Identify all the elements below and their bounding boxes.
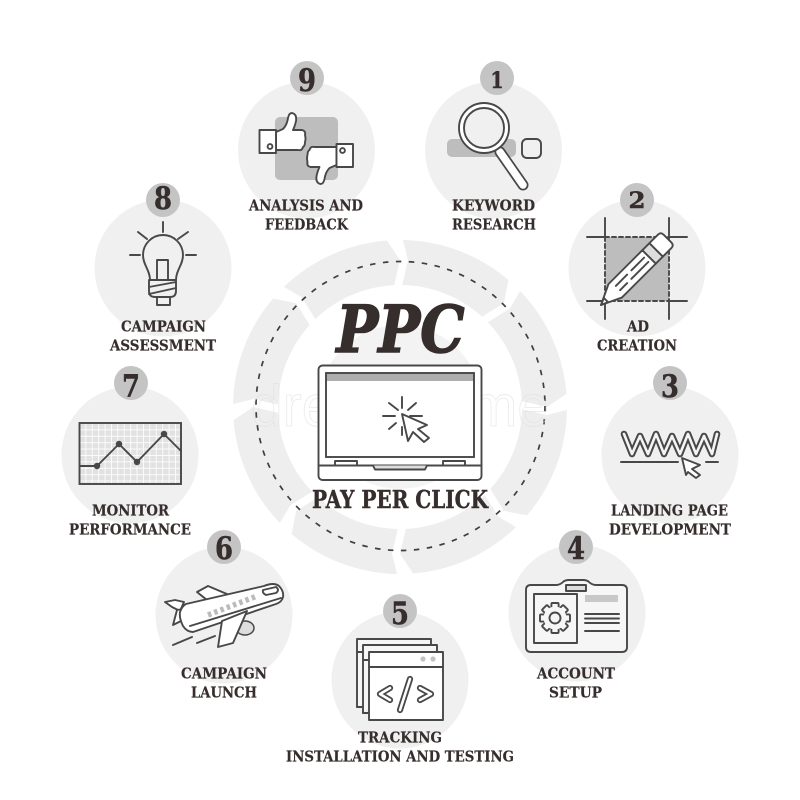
panel: step 4 account setup: ACCOUNT: [536, 666, 615, 682]
panel: step 5 tracking installation and testing: [286, 594, 514, 766]
panel: step 2 ad creation: AD: [626, 318, 649, 336]
icon: thumbs up and down: [260, 113, 353, 184]
title: PPC: PPC: [335, 292, 465, 368]
panel: step 4 account setup: SETUP: [549, 684, 602, 702]
panel: step 8 campaign assessment: 8: [154, 181, 172, 217]
icon: line chart: [80, 423, 181, 484]
panel: step 5 tracking installation and testing: TRACKING: [358, 730, 442, 746]
icon: id card with gear: [526, 580, 627, 652]
panel: step 5 tracking installation and testing: 5: [391, 596, 409, 632]
panel: step 7 monitor performance: PERFORMANCE: [69, 522, 191, 538]
panel: step 3 landing page development: [602, 366, 738, 538]
panel: step 1 keyword research: 1: [490, 68, 504, 94]
panel: step 7 monitor performance: [62, 366, 198, 538]
subtitle: pay per click: PAY PER CLICK: [312, 485, 489, 514]
panel: step 2 ad creation: [568, 183, 706, 354]
panel: step 8 campaign assessment: [94, 181, 232, 354]
panel: step 2 ad creation: 2: [628, 188, 646, 214]
panel: step 4 account setup: [508, 530, 646, 702]
panel: step 7 monitor performance: MONITOR: [92, 502, 170, 520]
icon: magnifier: [447, 103, 541, 185]
icon: code windows: [357, 639, 443, 720]
panel: step 2 ad creation: CREATION: [597, 338, 677, 354]
panel: step 7 monitor performance: 7: [122, 369, 140, 405]
inner pale disc: [318, 325, 482, 489]
icon: laptop with cursor: [318, 366, 482, 480]
icon: light bulb: [130, 222, 196, 305]
panel: step 3 landing page development: 3: [661, 369, 679, 405]
panel: step 6 campaign launch: CAMPAIGN: [181, 666, 267, 682]
panel: step 6 campaign launch: [156, 530, 292, 702]
panel: step 4 account setup: 4: [567, 531, 585, 567]
panel: step 3 landing page development: LANDING PAGE: [611, 502, 728, 520]
dashed orbit circle: [256, 262, 545, 550]
panel: step 1 keyword research: [425, 61, 562, 234]
panel: step 6 campaign launch: 6: [215, 531, 233, 567]
panel: step 3 landing page development: DEVELOPMENT: [609, 522, 731, 538]
panel: central segmented ring: [205, 212, 595, 602]
panel: step 5 tracking installation and testing: INSTALLATION AND TESTING: [286, 748, 514, 766]
panel: step 9 analysis and feedback: FEEDBACK: [265, 216, 349, 234]
panel: step 6 campaign launch: LAUNCH: [191, 684, 257, 702]
panel: step 9 analysis and feedback: ANALYSIS AND: [248, 198, 363, 214]
watermark: dreamstime: [251, 374, 549, 439]
panel: step 1 keyword research: RESEARCH: [452, 216, 536, 234]
panel: step 8 campaign assessment: CAMPAIGN: [121, 318, 206, 336]
panel: step 9 analysis and feedback: [238, 61, 375, 234]
panel: step 9 analysis and feedback: 9: [298, 63, 316, 99]
icon: airplane: [165, 584, 283, 647]
icon: pencil on grid: [587, 218, 687, 319]
panel: step 1 keyword research: KEYWORD: [452, 198, 535, 214]
icon: www with cursor: [621, 434, 718, 478]
panel: step 8 campaign assessment: ASSESSMENT: [109, 338, 216, 354]
